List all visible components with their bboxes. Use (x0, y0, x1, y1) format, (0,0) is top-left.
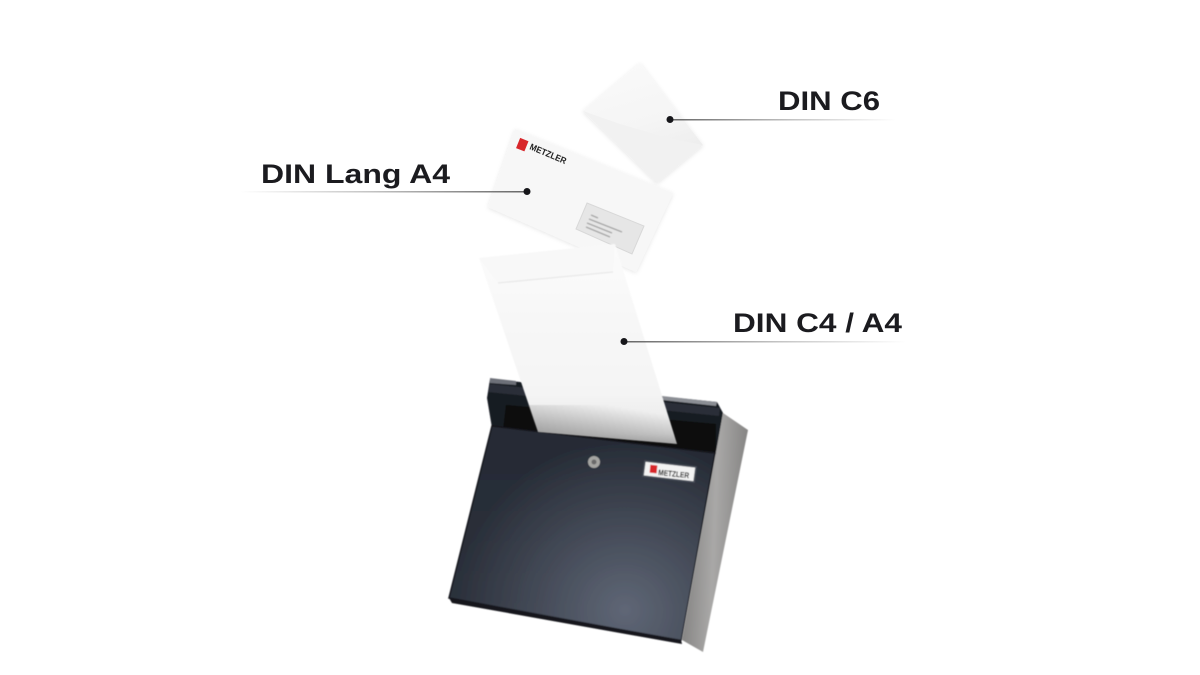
envelope: DIN C4 / A4 (479, 244, 677, 444)
callout: DIN C6: DIN C6 (778, 86, 880, 116)
logo: Metzler on envelope (516, 138, 568, 166)
lock (588, 456, 600, 468)
callout: DIN C6 (666, 86, 896, 123)
envelope: DIN C6 (583, 63, 703, 183)
envelope flap (479, 244, 615, 283)
mailbox bottom edge (449, 598, 682, 644)
callout: DIN C4 / A4 (620, 308, 906, 345)
logo: Metzler on envelope: METZLER (528, 142, 568, 166)
callout: DIN Lang A4 (240, 159, 530, 195)
envelope: DIN Lang A4 (488, 129, 673, 272)
address window (576, 203, 644, 254)
mailbox front highlight (449, 426, 715, 640)
mailbox front panel (449, 426, 715, 640)
envelope shadow at slot (527, 405, 677, 444)
mailbox nameplate: METZLER (658, 468, 690, 480)
mailbox back interior (487, 379, 723, 455)
callout: DIN C4 / A4: DIN C4 / A4 (733, 308, 902, 338)
mailbox (449, 378, 748, 652)
callout: DIN Lang A4: DIN Lang A4 (261, 159, 450, 189)
address lines (586, 215, 622, 237)
mailbox nameplate (643, 461, 696, 482)
mailbox side panel (682, 413, 748, 652)
